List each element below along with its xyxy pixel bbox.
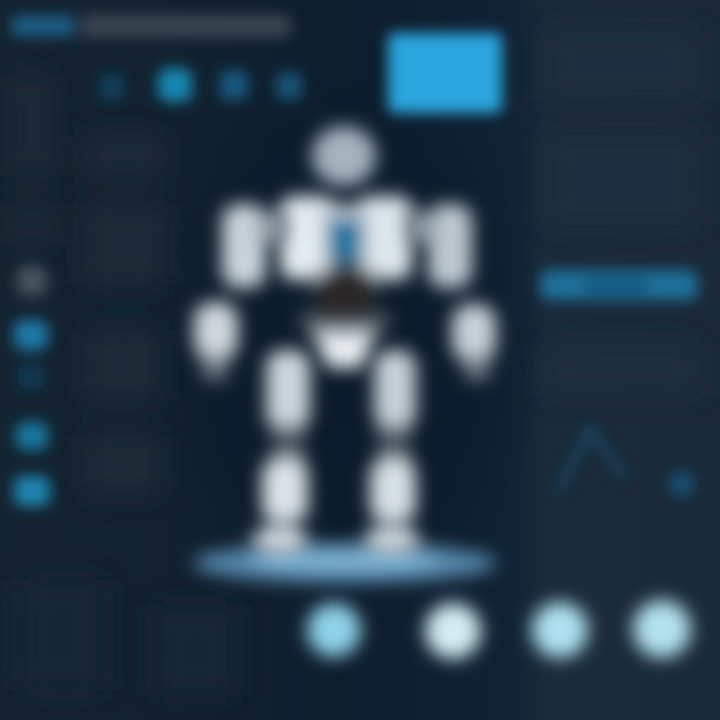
circle 3 [532,602,588,658]
left leg [252,350,310,554]
bottom circles [307,600,691,659]
circle 4 [633,600,691,658]
head [312,126,376,186]
panel: right column [545,30,700,395]
right leg [364,350,420,554]
side icons [14,266,50,506]
callout: blue card [388,33,502,113]
right arm [406,204,496,381]
platform [193,543,497,583]
heading bar [12,15,290,37]
robot [194,126,496,554]
blue stat bar [540,270,698,300]
panel: left column [15,75,165,495]
line chart [560,428,695,497]
panel: bottom left [20,580,235,695]
circle 2 [425,603,481,659]
central dark glow [145,40,545,640]
icon row: top nav [100,68,302,102]
torso [280,196,412,368]
left arm [194,204,288,381]
circle 1 [307,603,361,657]
